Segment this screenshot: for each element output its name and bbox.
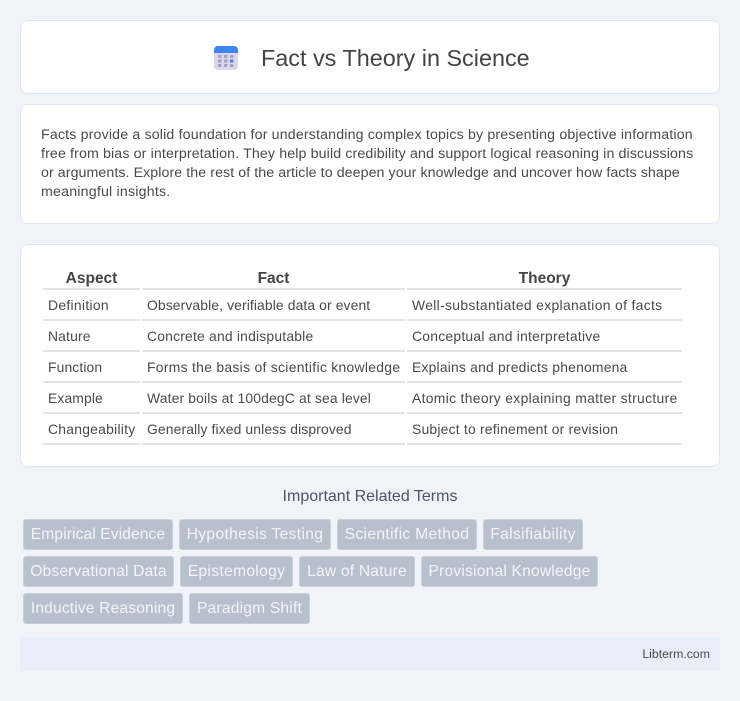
related terms tags: Law of Nature — [307, 563, 407, 580]
footer source label: Libterm.com — [642, 647, 710, 661]
comparison table: Concrete and indisputable — [147, 328, 313, 344]
related terms tags: Scientific Method — [345, 526, 469, 543]
comparison table: Observable, verifiable data or event — [147, 297, 370, 313]
table panel — [20, 244, 720, 467]
header panel — [20, 20, 720, 94]
related terms tags: Paradigm Shift — [197, 600, 302, 617]
footer — [20, 637, 720, 671]
related terms tags: Falsifiability — [490, 526, 576, 543]
related terms tags: Hypothesis Testing — [187, 526, 323, 543]
comparison table: Explains and predicts phenomena — [412, 359, 627, 375]
comparison table: Nature — [48, 328, 91, 344]
comparison table: Generally fixed unless disproved — [147, 421, 352, 437]
intro text panel — [20, 104, 720, 224]
comparison table: Function — [48, 359, 102, 375]
intro paragraph: free from bias or interpretation. They help build credibility and support logical reasoning in discussions — [41, 146, 693, 162]
comparison table: Well-substantiated explanation of facts — [412, 297, 662, 313]
comparison table: Subject to refinement or revision — [412, 421, 618, 437]
comparison table: Changeability — [48, 421, 135, 437]
comparison table: Example — [48, 390, 103, 406]
intro paragraph: meaningful insights. — [41, 184, 170, 200]
comparison table: Fact — [258, 270, 289, 287]
related terms tags: Observational Data — [30, 563, 167, 580]
intro paragraph: or arguments. Explore the rest of the article to deepen your knowledge and uncover how facts shape — [41, 165, 680, 181]
title: Fact vs Theory in Science — [261, 45, 530, 71]
comparison table: Theory — [519, 270, 570, 287]
comparison table: Aspect — [66, 270, 117, 287]
comparison table: Forms the basis of scientific knowledge — [147, 359, 400, 375]
related terms tags — [23, 519, 598, 624]
comparison table: Definition — [48, 297, 109, 313]
intro paragraph — [41, 127, 693, 200]
related terms tags: Inductive Reasoning — [31, 600, 175, 617]
comparison table: Atomic theory explaining matter structure — [412, 390, 678, 406]
related terms tags: Provisional Knowledge — [429, 563, 590, 580]
icon: calendar — [214, 46, 238, 70]
comparison table: Water boils at 100degC at sea level — [147, 390, 371, 406]
related terms tags: Epistemology — [188, 563, 285, 580]
intro paragraph: Facts provide a solid foundation for understanding complex topics by presenting objective information — [41, 127, 693, 143]
comparison table: Conceptual and interpretative — [412, 328, 600, 344]
related terms tags: Empirical Evidence — [31, 526, 165, 543]
related terms heading: Important Related Terms — [283, 488, 457, 505]
comparison table — [43, 270, 682, 445]
